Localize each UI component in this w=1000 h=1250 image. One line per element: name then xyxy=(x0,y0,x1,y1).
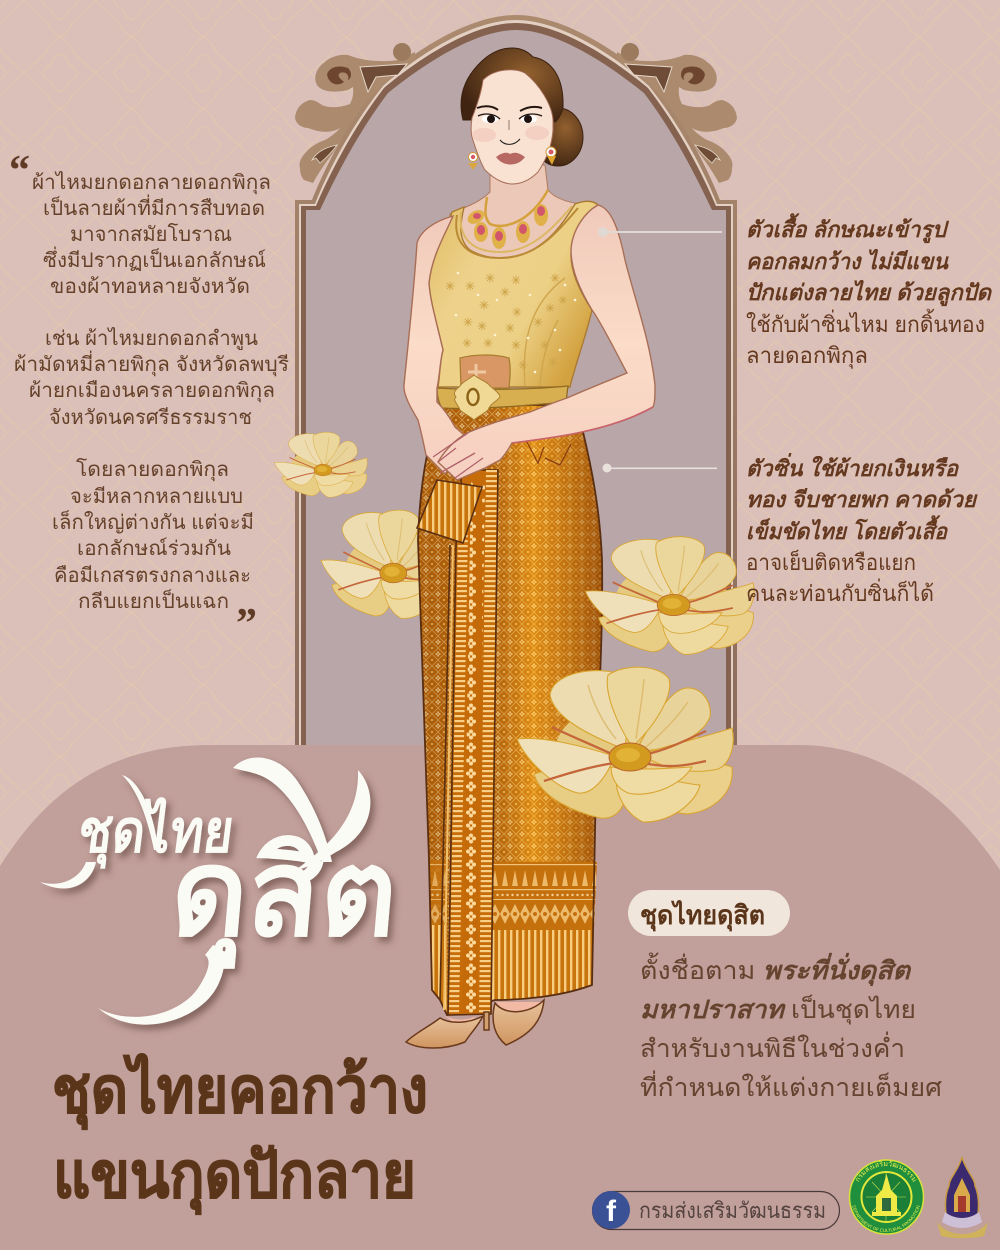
text: Dusit description: ตั้งชื่อตาม พระที่นั่งดุสิต xyxy=(640,952,912,986)
figure: woman in Thai Dusit dress xyxy=(404,48,655,1048)
quote text block: “ xyxy=(9,148,30,194)
bottom rounded panel xyxy=(0,745,1000,1250)
ornament: left scroll xyxy=(295,43,415,183)
facebook pill: f xyxy=(606,1195,617,1228)
arched frame panel xyxy=(295,15,737,745)
text: skirt description: อาจเย็บติดหรือแยก xyxy=(746,548,916,575)
flower: middle left xyxy=(321,510,459,619)
callout: skirt pointer xyxy=(602,464,717,472)
neck and chest skin xyxy=(450,165,592,262)
right arm and hand xyxy=(433,205,655,480)
quote text block: ผ้ามัดหมี่ลายพิกุล จังหวัดลพบุรี xyxy=(14,350,289,377)
label pill: ชุดไทยดุสิต xyxy=(640,899,765,932)
quote text block: เช่น ผ้าไหมยกดอกลำพูน xyxy=(45,327,258,351)
text: blouse description: ใช้กับผ้าซิ่นไหม ยกดิ้นทอง xyxy=(746,309,985,337)
ornament: right scroll xyxy=(617,43,737,183)
text: skirt description xyxy=(746,452,978,606)
title: subtitle brown: แขนกุดปักลาย xyxy=(53,1139,416,1215)
quote text block: ซึ่งมีปรากฏเป็นเอกลักษณ์ xyxy=(43,246,266,272)
bun and hair xyxy=(461,48,583,166)
text: skirt description: เข็มขัดไทย โดยตัวเสื้อ xyxy=(746,515,949,544)
label pill xyxy=(628,890,790,936)
quote text block: จังหวัดนครศรีธรรมราช xyxy=(49,407,252,429)
text: blouse description: ตัวเสื้อ ลักษณะเข้ารูป xyxy=(746,213,950,244)
skirt main xyxy=(418,405,602,1015)
quote text block: จะมีหลากหลายแบบ xyxy=(70,486,243,508)
shoes xyxy=(406,1000,544,1048)
quote text block: มาจากสมัยโบราณ xyxy=(70,223,232,246)
title: subtitle brown: ชุดไทยคอกว้าง xyxy=(52,1053,428,1130)
earrings xyxy=(468,147,556,170)
logo: ministry emblem xyxy=(937,1157,988,1238)
text: Dusit description: มหาปราสาท เป็นชุดไทย xyxy=(640,994,916,1025)
text: Dusit description: ที่กำหนดให้แต่งกายเต็มยศ xyxy=(640,1070,942,1102)
text: blouse description: คอกลมกว้าง ไม่มีแขน xyxy=(746,248,949,274)
belt xyxy=(437,355,568,420)
quote text block: โดยลายดอกพิกุล xyxy=(76,458,229,482)
facebook pill xyxy=(592,1191,840,1230)
text: skirt description: ทอง จีบชายพก คาดด้วย xyxy=(746,487,978,512)
quote text block: คือมีเกสรตรงกลางและ xyxy=(54,565,251,587)
flower: small upper left xyxy=(274,432,367,497)
text: blouse description: ปักแต่งลายไทย ด้วยลูกปัด xyxy=(746,279,993,307)
text: blouse description xyxy=(746,213,993,369)
large word and swashes: ดุสิต xyxy=(165,824,404,969)
text: Dusit description xyxy=(640,952,942,1102)
quote text block: ” xyxy=(236,601,257,647)
logo: department seal: กรมส่งเสริมวัฒนธรรม xyxy=(856,1160,916,1182)
quote text block: กลีบแยกเป็นแฉก xyxy=(78,588,229,613)
flower: right xyxy=(585,537,754,654)
text: skirt description: คนละท่อนกับซิ่นก็ได้ xyxy=(746,578,934,606)
text: blouse description: ลายดอกพิกุล xyxy=(746,343,868,369)
logo: department seal: DEPARTMENT OF CULTURAL PROMOTION xyxy=(852,1205,920,1232)
face xyxy=(471,70,553,184)
flower: large lower xyxy=(517,667,733,822)
small script words xyxy=(40,775,238,889)
quote text block: เล็กใหญ่ต่างกัน แต่จะมี xyxy=(52,509,254,534)
title: subtitle brown xyxy=(52,1053,428,1215)
quote text block: ผ้ายกเมืองนครลายดอกพิกุล xyxy=(29,380,275,403)
facebook pill: กรมส่งเสริมวัฒนธรรม xyxy=(639,1198,826,1223)
quote text block: ผ้าไหมยกดอกลายดอกพิกุล xyxy=(32,171,271,195)
quote text block: ของผ้าทอหลายจังหวัด xyxy=(50,276,250,298)
quote text block: เอกลักษณ์ร่วมกัน xyxy=(77,537,231,560)
quote text block: เป็นลายผ้าที่มีการสืบทอด xyxy=(43,194,265,220)
left arm xyxy=(404,216,470,474)
title: script Dusit xyxy=(40,758,404,1025)
bodice xyxy=(429,201,600,387)
quote text block xyxy=(9,148,289,647)
necklace xyxy=(465,190,548,249)
hanging fold xyxy=(417,480,482,543)
logo: department seal xyxy=(848,1159,924,1235)
large word and swashes xyxy=(98,758,404,1025)
text: Dusit description: สำหรับงานพิธีในช่วงค่ำ xyxy=(640,1031,905,1063)
callout: blouse pointer xyxy=(598,227,722,237)
text: skirt description: ตัวซิ่น ใช้ผ้ายกเงินหรือ xyxy=(746,452,960,481)
sash panel xyxy=(440,470,498,1015)
face details xyxy=(472,106,549,164)
small script words: ชุดไทย xyxy=(74,796,238,869)
